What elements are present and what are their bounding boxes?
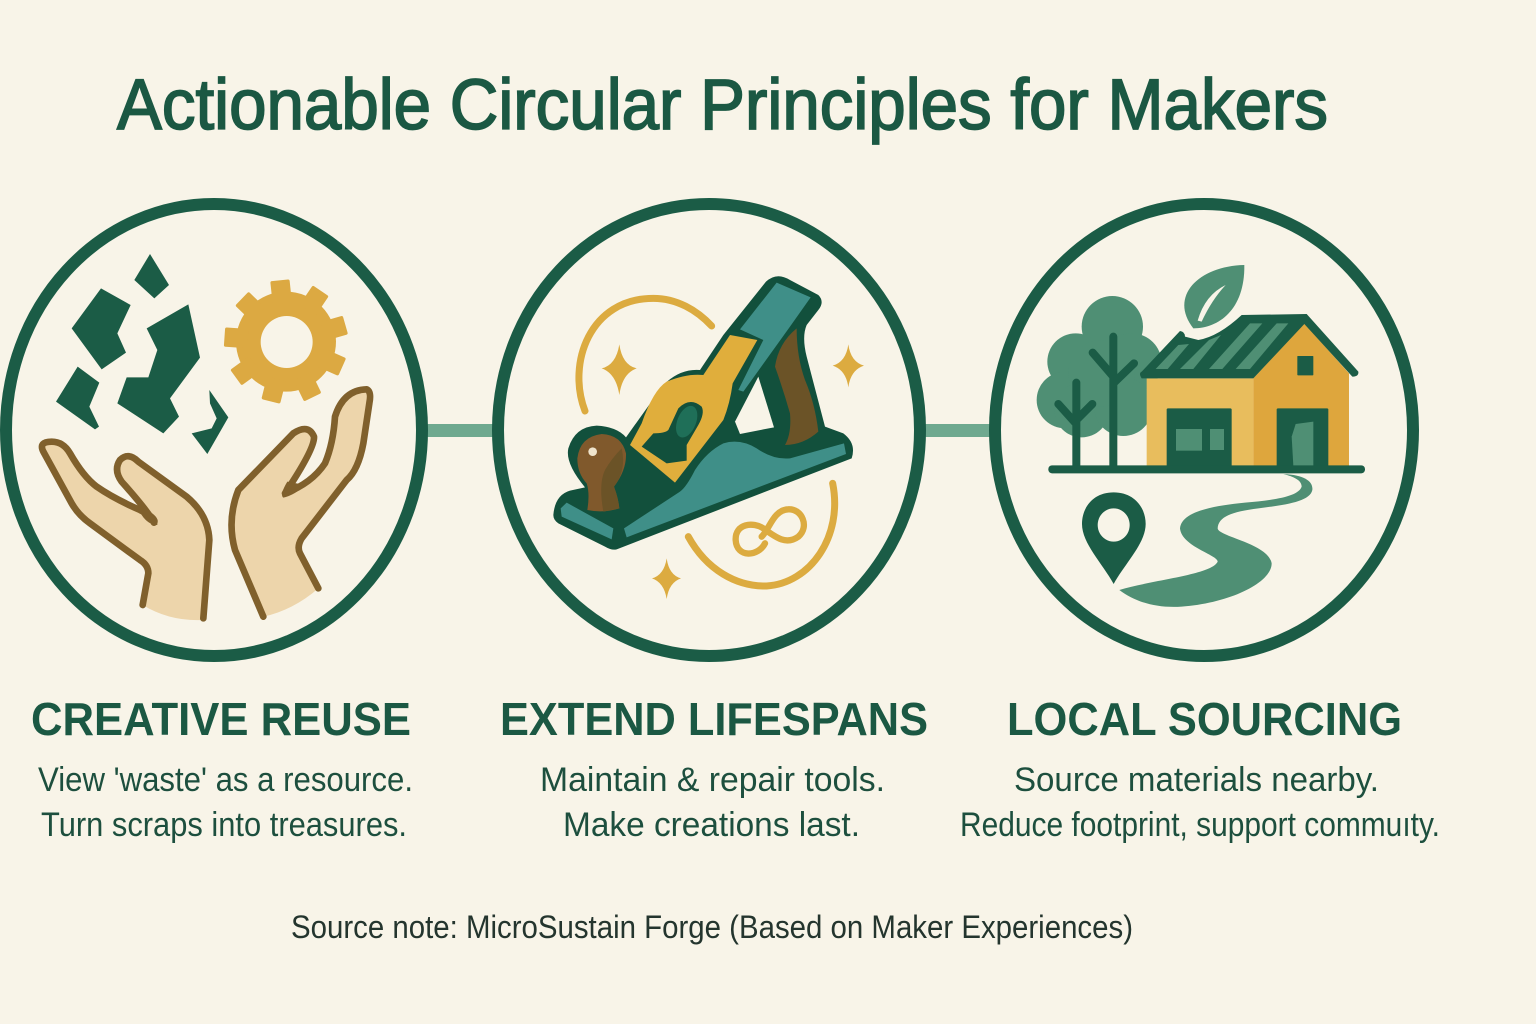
panel: local sourcing: [960, 204, 1440, 844]
ground line: [1048, 465, 1365, 473]
text: creative reuse line 1: View 'waste' as a resource.: [38, 761, 413, 799]
text: extend lifespans line 1: Maintain & repair tools.: [540, 761, 885, 799]
heading: extend lifespans: EXTEND LIFESPANS: [500, 693, 928, 745]
heading: local sourcing: LOCAL SOURCING: [1007, 693, 1402, 745]
location pin: [1082, 492, 1146, 584]
circle frame: creative reuse: [6, 204, 422, 656]
icon: house, trees, pin and road: [1037, 265, 1365, 607]
text: local sourcing line 2: Reduce footprint, support commuıty.: [960, 806, 1440, 844]
text: local sourcing line 1: Source materials nearby.: [1014, 761, 1379, 799]
blade lever: [738, 283, 811, 392]
source note: Source note: MicroSustain Forge (Based on Maker Experiences): [291, 909, 1133, 945]
front door: [1277, 408, 1328, 468]
garage door: [1167, 408, 1232, 468]
icon: hand plane with arcs: [553, 276, 864, 599]
frame opening: [735, 377, 774, 434]
brass frog: [630, 335, 757, 483]
arc top: [579, 298, 712, 411]
scrap shards: [56, 254, 228, 454]
tree canopy: [1037, 296, 1162, 437]
house walls: [1147, 378, 1253, 466]
roof panels: [1156, 323, 1288, 369]
sparkles: [602, 344, 864, 599]
title: Actionable Circular Principles for Makers: [117, 66, 1328, 145]
right hand: [232, 389, 370, 617]
front knob: [577, 434, 626, 511]
plane silhouette: [553, 276, 853, 550]
leaf: [1184, 265, 1244, 328]
circle frame: extend lifespans: [498, 204, 920, 656]
heading: creative reuse: CREATIVE REUSE: [31, 693, 411, 745]
text: extend lifespans line 2: Make creations last.: [563, 806, 860, 844]
left hand: [42, 442, 209, 620]
gear: [224, 279, 348, 404]
plane sole front: [561, 503, 613, 539]
road: [1119, 474, 1312, 607]
roof: [1140, 314, 1358, 378]
panel: creative reuse: [6, 204, 422, 844]
plane body: [624, 442, 846, 537]
frog slot: [642, 402, 703, 463]
arc bottom: [688, 483, 835, 586]
connector: lifespans to sourcing: [924, 424, 990, 437]
icon: hands, scraps and gear: [42, 254, 370, 620]
attic window: [1297, 356, 1313, 375]
circle frame: local sourcing: [995, 204, 1413, 656]
infinity symbol: [736, 509, 804, 554]
tree trunks: [1058, 337, 1134, 467]
rear handle: [775, 328, 818, 445]
connector: reuse to lifespans: [426, 424, 494, 437]
panel: extend lifespans: [498, 204, 928, 844]
text: creative reuse line 2: Turn scraps into treasures.: [41, 806, 407, 844]
